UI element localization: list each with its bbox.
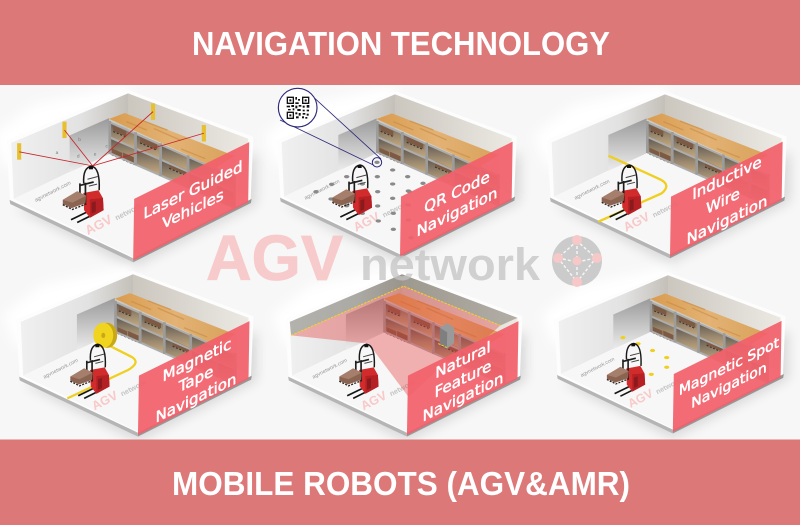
laser room illustration: AGV	[83, 211, 115, 238]
natural feature room illustration: AGV	[359, 388, 390, 413]
QR room illustration: AGV	[351, 209, 382, 235]
icon: network globe	[552, 235, 602, 287]
top banner	[0, 0, 800, 85]
panel: natural feature navigation	[272, 265, 526, 442]
QR room illustration	[263, 85, 520, 263]
magnetic tape label	[156, 334, 236, 427]
inductive wire label: Inductive	[692, 152, 762, 204]
laser room illustration	[0, 84, 257, 267]
inductive wire label: Wire	[706, 184, 740, 218]
QR code label: Navigation	[417, 183, 497, 241]
inductive wire room illustration: network	[651, 198, 681, 219]
magnetic tape label: Navigation	[156, 369, 236, 427]
natural feature label: Natural	[435, 337, 491, 382]
inductive wire label: Navigation	[687, 191, 767, 249]
magnetic spot room illustration	[541, 266, 789, 438]
watermark: AGV network logo	[206, 222, 602, 294]
laser room illustration: a	[56, 151, 59, 156]
title: NAVIGATION TECHNOLOGY	[192, 26, 610, 63]
laser room illustration: network	[113, 201, 144, 222]
panel: laser guided vehicles	[0, 84, 257, 267]
inductive wire room illustration	[533, 85, 790, 263]
magnetic tape room illustration: agvnetwork.com	[42, 357, 80, 380]
QR code label: QR Code	[424, 167, 490, 217]
bottom banner	[0, 440, 800, 525]
inductive wire label	[687, 152, 767, 249]
natural feature label: Navigation	[423, 368, 503, 426]
laser guided label: Vehicles	[162, 185, 224, 233]
magnetic spot room illustration: AGV	[625, 386, 656, 411]
magnetic spot label: Navigation	[691, 359, 767, 412]
panel: magnetic tape navigation	[3, 265, 257, 442]
magnetic tape label: Magnetic	[163, 334, 231, 386]
subtitle: MOBILE ROBOTS (AGV&AMR)	[172, 466, 630, 503]
QR room illustration: agvnetwork.com	[304, 178, 341, 202]
panel: QR code navigation	[263, 85, 520, 263]
QR room illustration: network	[381, 198, 411, 219]
watermark AGV: AGV	[206, 222, 343, 294]
magnetic tape label: Tape	[178, 361, 213, 397]
pillar	[440, 323, 454, 349]
magnetic tape room illustration: AGV	[90, 388, 121, 413]
panel: inductive wire navigation	[533, 85, 790, 263]
natural feature room illustration	[272, 265, 526, 442]
natural feature label: Feature	[435, 356, 491, 402]
laser room illustration: d	[77, 153, 80, 159]
panel: magnetic spot navigation	[541, 266, 789, 438]
inductive wire room illustration: agvnetwork.com	[574, 178, 611, 202]
laser guided label: Laser Guided	[143, 157, 243, 223]
magnetic tape room illustration: network	[119, 377, 149, 398]
laser room illustration: e	[94, 153, 97, 158]
laser room illustration: b	[78, 137, 81, 143]
watermark network: network	[360, 239, 541, 290]
natural feature room illustration: agvnetwork.com	[311, 357, 349, 380]
laser room illustration: c	[106, 144, 109, 149]
magnetic spot label: Magnetic Spot	[679, 334, 779, 399]
magnetic spot room illustration: agvnetwork.com	[580, 356, 616, 379]
laser room illustration: agvnetwork.com	[34, 180, 73, 204]
tape reel	[93, 323, 117, 348]
natural feature room illustration: network	[388, 377, 418, 398]
magnetic spot room illustration: network	[655, 377, 682, 396]
magnetic tape room illustration	[3, 265, 257, 442]
inductive wire room illustration: AGV	[621, 209, 652, 235]
natural feature label	[423, 337, 503, 426]
